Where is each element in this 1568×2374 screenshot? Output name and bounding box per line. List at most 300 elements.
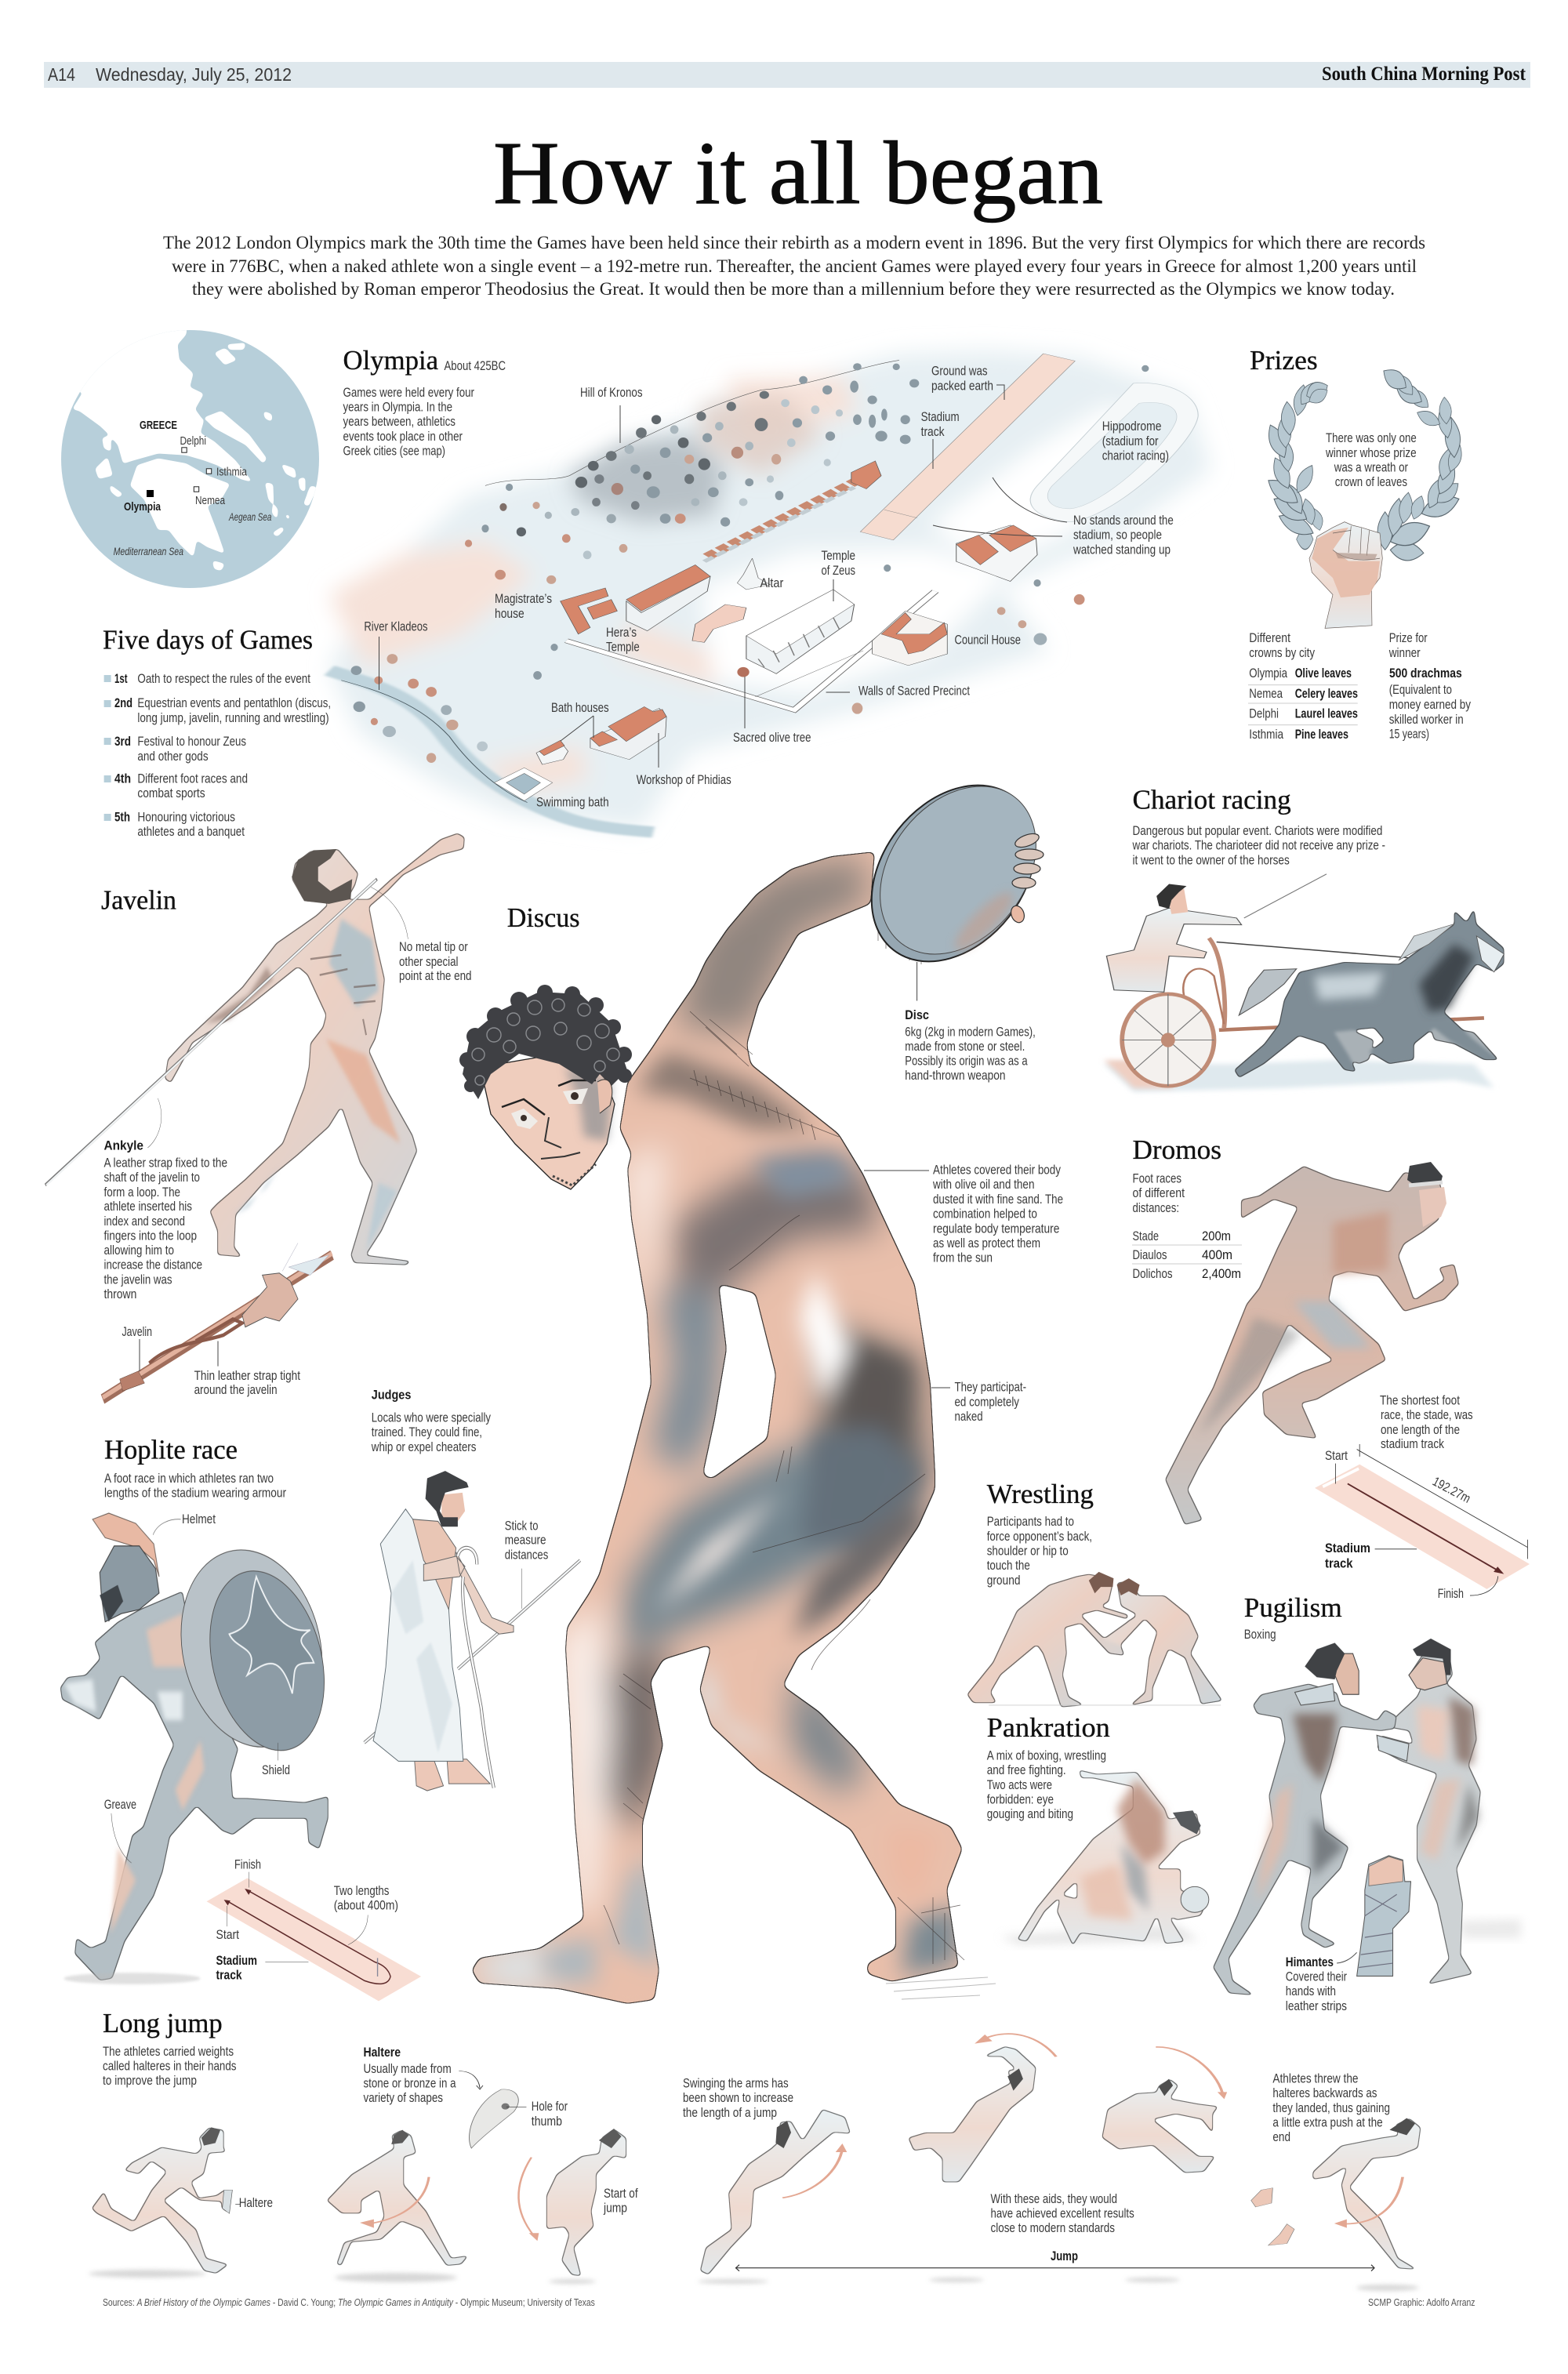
map labels: Isthmia [216, 466, 248, 478]
hippodrome [1030, 383, 1198, 522]
Stick label [505, 1519, 548, 1563]
long jump notes: Swinging the arms has [683, 2077, 789, 2091]
panel: long jump flight figures [700, 2034, 1421, 2275]
prize for winner: (Equivalent to [1389, 683, 1452, 697]
Wrestling heading and text: shoulder or hip to [987, 1545, 1069, 1559]
distances table: 400m [1202, 1248, 1232, 1262]
olive oil note: from the sun [933, 1251, 993, 1265]
Five days list: long jump, javelin, running and wrestling) [137, 711, 329, 725]
Olympia site labels: packed earth [931, 379, 993, 393]
Haltere text: thumb [532, 2114, 562, 2129]
Haltere text: Haltere [364, 2045, 401, 2060]
stadium track diagram: 192.27m [1430, 1475, 1472, 1506]
Long jump heading and text: called halteres in their hands [103, 2060, 237, 2074]
stadium track diagram: Stadium [1325, 1541, 1370, 1555]
crowns table: Celery leaves [1295, 687, 1358, 701]
crowns table: Laurel leaves [1295, 707, 1358, 721]
distances table [1132, 1229, 1242, 1281]
Five days list: 4th [114, 771, 131, 786]
intro text: were in 776BC, when a naked athlete won a single event – a 192-metre run. Thereafter, the ancient Games were played every four years in Greece for almost 1,200 years until [172, 256, 1417, 277]
Long jump heading and text: Long jump [103, 2008, 223, 2038]
Pankration heading and text: Pankration [987, 1712, 1110, 1743]
Olympia site labels: Bath houses [551, 701, 609, 715]
map labels: Olympia [124, 500, 162, 514]
ridge line [485, 360, 899, 485]
salmon swing arrows [372, 2177, 429, 2223]
Ankyle note: fingers into the loop [103, 1229, 197, 1243]
map labels: Mediterranean Sea [114, 545, 183, 557]
prize for winner: winner [1388, 646, 1421, 660]
prize for winner: money earned by [1389, 698, 1472, 712]
naked note [955, 1380, 1026, 1424]
Five days list: 3rd [114, 735, 131, 749]
hair [1089, 1572, 1140, 1595]
long jump notes [683, 2072, 1390, 2235]
hoplite labels: Shield [262, 1763, 290, 1777]
hoplite labels: Start [216, 1928, 239, 1942]
stick [365, 1560, 580, 1743]
long jump notes: a little extra push at the [1272, 2116, 1383, 2130]
crowns table: Delphi [1249, 707, 1279, 721]
hair marks [775, 2068, 1415, 2148]
Five days list: 5th [114, 811, 130, 825]
prizes note [1325, 431, 1417, 489]
long jump notes: end [1272, 2130, 1290, 2144]
Discus heading: Discus [507, 902, 580, 933]
figure 4 [700, 2109, 851, 2275]
prize for winner: skilled worker in [1389, 713, 1464, 727]
title: How it all began [493, 123, 1103, 223]
panel: Judge figure [365, 1471, 580, 1791]
trees [351, 363, 1149, 763]
distances table: Diaulos [1132, 1248, 1167, 1262]
Olympia site labels: chariot racing) [1102, 449, 1169, 463]
pole and frame [1219, 1018, 1484, 1030]
Disc note: 6kg (2kg in modern Games), [905, 1025, 1036, 1039]
himantes arrow [1337, 1952, 1357, 1963]
spear [45, 879, 377, 1185]
Ankyle note: shaft of the javelin to [103, 1171, 200, 1185]
prizes note: was a wreath or [1334, 460, 1408, 474]
Pankration heading and text: and free fighting. [987, 1763, 1066, 1777]
stade note: The shortest foot [1380, 1394, 1460, 1408]
left branch [1264, 378, 1331, 550]
Haltere text: stone or bronze in a [364, 2077, 456, 2091]
panel: long jump run-up figures [89, 2071, 1419, 2291]
naked note: They participat- [955, 1380, 1026, 1394]
haltere figure 1 [223, 2190, 232, 2213]
Stick label: measure [505, 1534, 546, 1548]
Ankyle note: Ankyle [103, 1139, 143, 1153]
stadium track diagram: track [1325, 1556, 1353, 1570]
Dromos heading and table: Dromos [1132, 1134, 1221, 1165]
olive oil note: Athletes covered their body [933, 1163, 1062, 1178]
leader to tip [371, 887, 408, 939]
Haltere text: jump [603, 2202, 627, 2216]
distances table: 2,400m [1202, 1267, 1241, 1281]
stade note: one length of the [1381, 1423, 1460, 1437]
Five days list: Oath to respect the rules of the event [137, 672, 310, 686]
ground shadows [89, 2270, 1419, 2291]
Olympia site labels: Temple [606, 641, 640, 655]
Dromos heading and table: distances: [1132, 1201, 1179, 1215]
Olympia heading: About 425BC [444, 358, 506, 373]
crowns table: Olympia [1249, 666, 1288, 681]
Haltere text: Usually made from [364, 2062, 452, 2076]
javelin grip detail [103, 1243, 332, 1399]
credit: SCMP Graphic: Adolfo Arranz [1368, 2296, 1475, 2308]
Ankyle note [103, 1139, 227, 1301]
no metal tip note: other special [399, 955, 458, 969]
long jump notes: they landed, thus gaining [1272, 2101, 1390, 2115]
fingers [1009, 831, 1044, 924]
olive oil note: regulate body temperature [933, 1221, 1059, 1236]
Olympia site labels: Hill of Kronos [580, 386, 643, 400]
jump distance arrow: Jump [1051, 2249, 1078, 2263]
intro text: The 2012 London Olympics mark the 30th time the Games have been held since their rebirth as a modern event in 1896. But the very first Olympics for which there are records [163, 233, 1425, 253]
Hoplite race heading: Hoplite race [104, 1434, 238, 1465]
hair marks [201, 2127, 622, 2148]
shadow [64, 1973, 201, 1984]
distances table: Dolichos [1132, 1267, 1173, 1281]
Wrestling heading and text: Participants had to [987, 1515, 1074, 1529]
no metal tip note: No metal tip or [399, 940, 468, 954]
Judges text: whip or expel cheaters [371, 1440, 476, 1454]
chest [413, 1519, 456, 1610]
no metal tip note [399, 940, 472, 983]
wraps [1295, 1683, 1409, 1761]
map labels [114, 419, 272, 557]
whip [1244, 874, 1327, 918]
hoplite labels: Two lengths [334, 1884, 389, 1898]
long jump notes: close to modern standards [991, 2221, 1115, 2235]
Wrestling heading and text: ground [987, 1574, 1021, 1588]
javelin grip detail: Thin leather strap tight [194, 1369, 300, 1383]
haltere detail [470, 2089, 518, 2148]
crest [93, 1513, 159, 1577]
Stick label: Stick to [505, 1519, 538, 1533]
temple of Zeus [746, 590, 855, 673]
robe [373, 1509, 463, 1761]
Ankyle note: form a loop. The [103, 1185, 180, 1200]
watercolour ground wash [329, 350, 1211, 829]
Dromos heading and table [1132, 1134, 1242, 1281]
stadium track [207, 1878, 421, 2001]
naked note: ed completely [955, 1395, 1020, 1409]
Haltere text [239, 2045, 638, 2216]
olive oil note: combination helped to [933, 1207, 1037, 1221]
Pugilism heading [1244, 1592, 1342, 1642]
Haltere text: Start of [604, 2187, 638, 2201]
prizes note: There was only one [1326, 431, 1417, 445]
icon: wreath held in fist [1264, 364, 1465, 628]
ground wash [1104, 1060, 1494, 1092]
Long jump heading and text: The athletes carried weights [103, 2045, 234, 2059]
figure 7 [1312, 2118, 1421, 2270]
Chariot racing heading and text [1132, 785, 1385, 867]
Olympia site labels: River Kladeos [364, 620, 428, 634]
small shrines [692, 604, 746, 642]
Olympia site labels: Ground was [931, 364, 988, 378]
shield [159, 1529, 344, 1768]
distances table: 200m [1202, 1229, 1231, 1243]
horse tail [1239, 969, 1297, 1015]
crowns table: crowns by city [1249, 646, 1316, 660]
Olympia site labels: Workshop of Phidias [637, 773, 731, 787]
horse mane [1399, 924, 1454, 960]
Ankyle note: index and second [103, 1214, 185, 1229]
figure 2 [326, 2130, 469, 2266]
crowns table: Isthmia [1249, 728, 1284, 742]
Dromos heading and table: of different [1132, 1186, 1185, 1200]
Disc note [905, 1008, 1036, 1083]
crowns table: Olive leaves [1295, 666, 1352, 681]
river Kladeos [329, 670, 653, 832]
long jump notes: have achieved excellent results [991, 2207, 1134, 2221]
Ankyle note: the javelin was [103, 1273, 172, 1287]
Judges text [371, 1388, 492, 1454]
ground strokes [886, 1977, 996, 1999]
javelin grip detail: around the javelin [194, 1383, 278, 1397]
long jump notes: Athletes threw the [1272, 2072, 1358, 2086]
Wrestling heading and text: Wrestling [987, 1479, 1094, 1509]
Judges text: trained. They could fine, [372, 1425, 482, 1439]
header bar: Wednesday, July 25, 2012 [96, 64, 292, 85]
hoplite labels [104, 1512, 398, 1983]
panel: chariot illustration [1104, 874, 1504, 1092]
long jump notes: the length of a jump [683, 2106, 777, 2120]
precinct walls [566, 591, 935, 710]
Himantes note: leather strips [1286, 1999, 1347, 2013]
stade note [1380, 1394, 1473, 1451]
Olympia site labels: Altar [760, 576, 784, 590]
head [459, 985, 632, 1189]
himantes hand [1357, 1856, 1410, 1976]
Ankyle note: A leather strap fixed to the [103, 1156, 227, 1171]
horse [1234, 908, 1504, 1078]
leader [521, 1569, 523, 1609]
staff [458, 1548, 494, 1788]
crowns table: Pine leaves [1295, 728, 1348, 742]
Olympia site labels: Swimming bath [536, 795, 609, 809]
Hoplite race heading: A foot race in which athletes ran two [104, 1472, 274, 1486]
stade note: race, the stade, was [1381, 1408, 1473, 1422]
Olympia intro [343, 386, 474, 458]
Olympia heading [343, 345, 506, 376]
figure 3 [546, 2129, 626, 2276]
reins [1217, 942, 1484, 964]
intro text [163, 233, 1425, 299]
Olympia site labels: watched standing up [1073, 543, 1171, 557]
olive oil note [932, 1163, 1063, 1265]
header bar [44, 62, 1530, 88]
Olympia heading: Olympia [343, 345, 438, 376]
header bar: South China Morning Post [1322, 64, 1526, 85]
leader: disc [916, 962, 918, 1000]
right boxer [1377, 1645, 1481, 1984]
panel: Dromos runner [1165, 1162, 1459, 1525]
olive oil note: dusted it with fine sand. The [933, 1192, 1063, 1207]
Haltere text: Haltere [239, 2196, 273, 2210]
stadium track diagram [1315, 1444, 1530, 1601]
skin wash [64, 1614, 204, 1933]
figure 1 [92, 2127, 231, 2274]
Himantes note: Covered their [1286, 1970, 1347, 1984]
Himantes note [1286, 1955, 1347, 2013]
Olympia site labels: No stands around the [1073, 514, 1174, 528]
hoplite labels: Finish [234, 1857, 261, 1871]
haltere arrow [459, 2071, 483, 2089]
bath houses [536, 742, 568, 764]
Chariot racing heading and text: Dangerous but popular event. Chariots were modified [1132, 824, 1382, 838]
Himantes note: hands with [1286, 1984, 1336, 1998]
hatching [604, 909, 964, 1964]
Five days of Games heading: Five days of Games [103, 625, 313, 655]
olive oil note: with olive oil and then [932, 1178, 1035, 1192]
Olympia site labels: Magistrate’s [495, 592, 552, 606]
Five days list: Equestrian events and pentathlon (discus, [137, 696, 331, 710]
Olympia site labels: Walls of Sacred Precinct [858, 684, 970, 699]
wheel [1122, 994, 1214, 1086]
Five days list: athletes and a banquet [137, 825, 245, 839]
intro text: they were abolished by Roman emperor Theodosius the Great. It would then be more than a millennium before they were resurrected as the Olympics we know today. [192, 279, 1395, 299]
Chariot racing heading and text: it went to the owner of the horses [1132, 853, 1290, 867]
crowns table: Nemea [1249, 687, 1283, 701]
stadium track [860, 354, 1075, 540]
workshop of Phidias [590, 709, 666, 760]
Ankyle note: thrown [103, 1287, 136, 1301]
Five days list: and other gods [137, 750, 209, 764]
Hera's temple [626, 576, 710, 631]
Olympia site labels: Council House [955, 633, 1021, 647]
Olympia site labels: Sacred olive tree [733, 731, 811, 745]
olive oil note: as well as protect them [933, 1236, 1040, 1251]
Pugilism heading: Boxing [1244, 1628, 1276, 1642]
Hoplite race heading [104, 1434, 286, 1501]
figure 6 [1102, 2079, 1218, 2173]
prize for winner: 15 years) [1389, 727, 1429, 741]
stadium track diagram: Finish [1438, 1587, 1464, 1601]
Olympia site labels: track [921, 425, 945, 439]
Olympia site labels: Stadium [921, 410, 960, 424]
hoplite labels: Stadium [216, 1954, 257, 1968]
hoplite labels: Helmet [182, 1512, 216, 1526]
Olympia site labels: Hippodrome [1102, 419, 1162, 434]
charioteer [1106, 908, 1242, 992]
Olympia site labels: stadium, so people [1073, 528, 1162, 543]
prize for winner: Prize for [1389, 631, 1428, 645]
Haltere text: Hole for [532, 2100, 568, 2114]
arm [423, 1552, 514, 1634]
Chariot racing heading and text: Chariot racing [1132, 785, 1291, 815]
naked note: naked [955, 1410, 983, 1424]
head [441, 1493, 465, 1523]
Hoplite race heading: lengths of the stadium wearing armour [104, 1486, 286, 1501]
Olympia intro: years in Olympia. In the [343, 400, 452, 414]
hoplite labels: (about 400m) [334, 1899, 398, 1913]
left boxer head [1335, 1653, 1359, 1694]
body [470, 851, 963, 2004]
Olympia intro: events took place in other [343, 430, 463, 444]
panel: Olympia site illustration [329, 350, 1211, 832]
Five days list: Festival to honour Zeus [137, 735, 246, 749]
leader: naked [931, 1387, 950, 1388]
hair [463, 992, 627, 1099]
thrown halteres [1251, 2188, 1272, 2207]
feet [415, 1759, 490, 1791]
Disc note: hand-thrown weapon [905, 1069, 1005, 1083]
Haltere text: variety of shapes [364, 2091, 443, 2105]
long jump notes: halteres backwards as [1272, 2086, 1377, 2100]
map labels: Delphi [180, 434, 206, 448]
Pankration heading and text: gouging and biting [987, 1807, 1073, 1821]
Long jump heading and text: to improve the jump [103, 2074, 197, 2088]
Chariot racing heading and text: war chariots. The charioteer did not receive any prize - [1132, 839, 1385, 853]
Stick label: distances [505, 1548, 548, 1563]
Pankration heading and text: Two acts were [987, 1778, 1052, 1792]
fist [1309, 522, 1382, 628]
no metal tip note: point at the end [399, 969, 472, 983]
map labels: GREECE [140, 419, 177, 432]
Pugilism heading: Pugilism [1244, 1592, 1342, 1623]
jump distance arrow [735, 2249, 1374, 2271]
Olympia intro: Greek cities (see map) [343, 444, 445, 458]
header bar: A14 [48, 64, 75, 85]
Ankyle note: increase the distance [103, 1258, 202, 1272]
right boxer head [1409, 1658, 1446, 1690]
Olympia intro: years between, athletics [343, 415, 456, 429]
prize for winner: 500 drachmas [1389, 666, 1462, 681]
Ankyle note: allowing him to [103, 1243, 174, 1258]
Judges text: Judges [372, 1388, 411, 1402]
patches [205, 919, 401, 1251]
panel: wrestlers [967, 1572, 1223, 1708]
Javelin heading: Javelin [101, 884, 176, 916]
abs shading [310, 955, 376, 1035]
disc [838, 753, 1069, 993]
prizes note: crown of leaves [1335, 475, 1407, 489]
Ankyle note: athlete inserted his [103, 1200, 192, 1214]
Wrestling heading and text: touch the [987, 1559, 1030, 1573]
hair [292, 849, 352, 904]
Pankration heading and text [987, 1712, 1110, 1821]
hoplite labels: track [216, 1969, 242, 1983]
Olympia site labels: house [495, 607, 524, 621]
Five days list: combat sports [137, 786, 205, 800]
leader to ankyle [147, 1098, 162, 1148]
Olympia site labels: Hera’s [606, 626, 637, 640]
Disc note: Possibly its origin was as a [905, 1055, 1028, 1069]
hill of Kronos shading [569, 397, 822, 522]
magistrate's house [561, 588, 608, 634]
Wrestling heading and text: force opponent’s back, [987, 1530, 1092, 1544]
Five days list: Different foot races and [137, 771, 248, 786]
treasuries row [707, 479, 860, 557]
salmon arrows [782, 2148, 842, 2198]
stade note: stadium track [1381, 1437, 1445, 1451]
map labels: Nemea [195, 494, 226, 507]
crowns table: Different [1249, 631, 1290, 645]
Himantes note: Himantes [1286, 1955, 1334, 1969]
Olympia site labels: Temple [822, 549, 855, 563]
hoplite labels: Greave [104, 1798, 136, 1812]
Olympia intro: Games were held every four [343, 386, 474, 400]
javelin grip detail: Javelin [122, 1325, 152, 1339]
council house [873, 611, 947, 666]
map labels: Aegean Sea [228, 510, 272, 523]
Five days list: Honouring victorious [137, 811, 235, 825]
leader lines [153, 1519, 180, 1535]
